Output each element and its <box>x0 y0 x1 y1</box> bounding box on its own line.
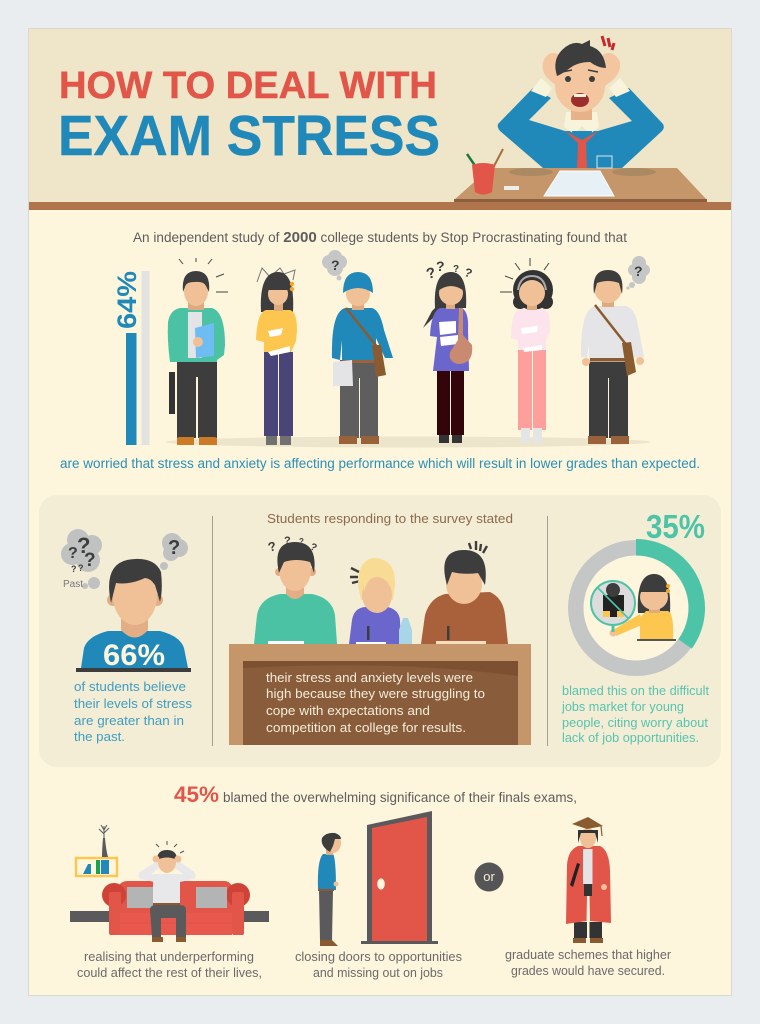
figure: student 3 in blue sweater <box>322 250 393 444</box>
desk with text: their stress and anxiety levels were <box>266 670 473 685</box>
chart: donut <box>568 539 705 676</box>
column: 66 percent <box>61 529 193 744</box>
icon: past thought clouds <box>61 529 188 590</box>
chart: 64 percent bar <box>112 271 150 445</box>
heading: 45 percent: blamed the overwhelming significance of their finals exams, <box>223 790 577 805</box>
text: door caption <box>295 949 462 980</box>
scene: graduate <box>505 817 672 978</box>
text: 66 percent caption <box>74 679 193 744</box>
icon: past thought clouds: ? <box>78 563 84 573</box>
figure: student 3 in blue sweater: ? <box>331 257 340 273</box>
scene: closing door <box>295 811 462 980</box>
badge: or: or <box>483 869 495 884</box>
icon: sofa <box>102 881 250 935</box>
icon: door <box>361 811 438 944</box>
column: 35 percent <box>561 508 709 745</box>
icon: stressed man <box>498 36 664 168</box>
panel: survey <box>39 495 721 767</box>
icon: past thought clouds: ? <box>77 533 90 558</box>
text: 66 percent caption: their levels of stress <box>74 696 193 711</box>
column: survey statement <box>229 511 531 745</box>
text: sofa caption: could affect the rest of their lives, <box>77 965 262 980</box>
text: door caption: and missing out on jobs <box>313 965 443 980</box>
figure: student 2 in yellow top <box>256 268 297 445</box>
figure: student 1 in green jacket <box>168 258 228 445</box>
text: 35 percent caption: lack of job opportunities. <box>562 730 699 745</box>
figure: student 6 in grey sweater: ? <box>634 263 643 279</box>
figure: student 4 in purple top: ? <box>453 264 459 275</box>
text: 35 percent caption <box>561 683 709 745</box>
figure: student 4 in purple top: ? <box>463 265 474 281</box>
scene: man on sofa <box>70 825 269 980</box>
desk with text <box>229 644 531 745</box>
text: graduate caption <box>505 947 672 978</box>
text: 66 percent caption: of students believe <box>74 679 186 694</box>
figure: student 4 in purple top <box>423 258 474 443</box>
title line 2: EXAM STRESS <box>58 104 440 168</box>
stat: 35 percent: 35% <box>646 508 705 545</box>
figure: student in green: ? <box>308 542 318 554</box>
desk with text: competition at college for results. <box>266 720 466 735</box>
text: worried caption: are worried that stress and anxiety is affecting performance which will result in lower grades than expected. <box>60 456 700 471</box>
figure: student 5 in pink top <box>500 258 553 443</box>
text: graduate caption: graduate schemes that higher <box>505 947 672 962</box>
icon: past thought clouds: ? <box>168 537 180 559</box>
figure: student in green: ? <box>284 535 291 547</box>
figure: student in purple <box>349 558 412 644</box>
figure: graduate <box>566 817 611 943</box>
icon: shelf <box>76 825 117 876</box>
text: 66 percent caption: the past. <box>74 729 125 744</box>
figure: student with 66 percent shirt: 66% <box>103 639 165 672</box>
text: 35 percent caption: blamed this on the difficult <box>562 683 709 698</box>
icon: past thought clouds: Past <box>63 579 83 590</box>
badge: or <box>474 862 504 892</box>
icon: past thought clouds: ? <box>68 545 78 562</box>
text: 35 percent caption: jobs market for young <box>561 699 684 714</box>
figure: student in green: ? <box>266 538 278 555</box>
icon: woman with no-jobs sign <box>591 574 676 641</box>
text: intro: An independent study of 2000 college students by Stop Procrastinating found that <box>133 229 627 246</box>
figure: student 4 in purple top: ? <box>436 258 445 274</box>
figure: student 6 in grey sweater <box>581 256 650 444</box>
figure: student with 66 percent shirt <box>76 559 191 672</box>
figure: stressed man <box>138 841 196 942</box>
icon: past thought clouds: ? <box>84 550 96 571</box>
text: sofa caption <box>77 949 262 980</box>
heading: 45 percent: 45% <box>174 782 219 807</box>
icon: desk <box>454 149 707 204</box>
figure: man facing door <box>318 833 341 946</box>
desk with text: high because they were struggling to <box>266 686 485 701</box>
title line 1: HOW TO DEAL WITH <box>59 65 437 107</box>
text: graduate caption: grades would have secured. <box>511 963 665 978</box>
figure: student 4 in purple top: ? <box>424 264 438 283</box>
text: door caption: closing doors to opportunities <box>295 949 462 964</box>
figure: student in brown <box>421 541 508 644</box>
desk with text: cope with expectations and <box>266 703 430 718</box>
panel: header <box>29 29 731 210</box>
text: sofa caption: realising that underperforming <box>84 949 254 964</box>
figure: student in green <box>254 535 337 644</box>
text: 35 percent caption: people, citing worry about <box>562 715 708 730</box>
chart: 64 percent bar: 64% <box>112 271 142 329</box>
ground shadow <box>166 436 650 448</box>
heading: Students responding to the survey stated <box>267 511 513 526</box>
heading: 45 percent <box>174 782 577 807</box>
figure: student in green: ? <box>299 537 304 546</box>
icon: past thought clouds: ? <box>71 564 76 574</box>
text: 66 percent caption: are greater than in <box>74 713 184 728</box>
